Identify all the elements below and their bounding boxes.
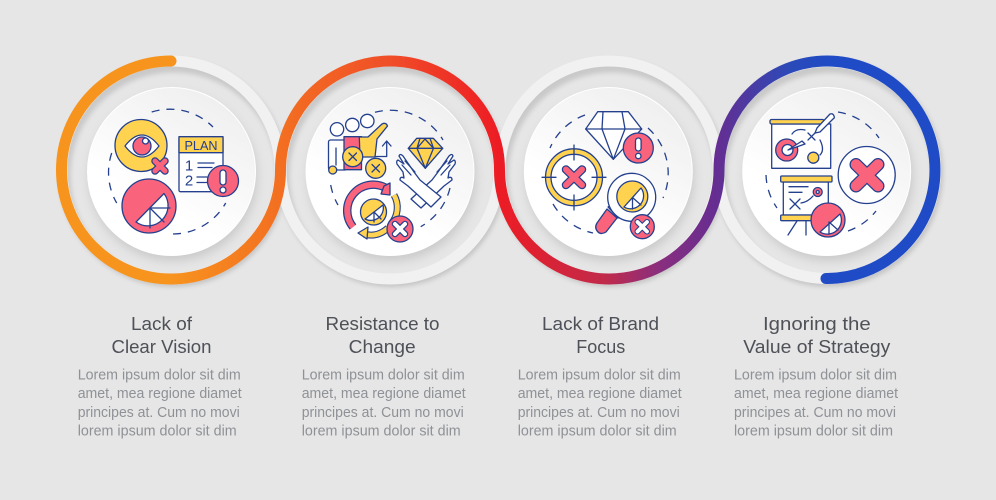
body text: amet, mea regione diamet xyxy=(302,386,466,402)
panel: step 1 circle xyxy=(59,59,287,287)
heading: lack of brand focus: Lack of Brand xyxy=(542,313,659,334)
text: step 1 xyxy=(78,313,242,440)
heading: lack of clear vision xyxy=(112,313,212,357)
icon: lack of clear vision: PLAN xyxy=(184,138,218,153)
body text: amet, mea regione diamet xyxy=(78,386,242,402)
heading: resistance to change: Resistance to xyxy=(326,313,440,334)
icon: resistance to change xyxy=(328,110,455,242)
icon: lack of clear vision: 1 xyxy=(185,158,193,174)
heading: lack of brand focus xyxy=(542,313,659,357)
body text: Lorem ipsum dolor sit dim xyxy=(518,368,681,384)
body text: principes at. Cum no movi xyxy=(78,405,240,421)
text: step 4 xyxy=(734,313,898,440)
body text xyxy=(518,368,682,440)
body text: Lorem ipsum dolor sit dim xyxy=(302,368,465,384)
icon: lack of brand focus xyxy=(542,112,668,239)
text: step 3 xyxy=(518,313,682,440)
icon: lack of clear vision xyxy=(109,109,238,234)
gradient ribbon connecting the steps xyxy=(62,61,935,279)
heading: ignoring the value of strategy xyxy=(743,313,891,357)
panel: step 4 circle xyxy=(715,59,943,287)
body text: principes at. Cum no movi xyxy=(302,405,464,421)
body text xyxy=(78,368,242,440)
heading: lack of clear vision: Lack of xyxy=(131,313,193,334)
body text: amet, mea regione diamet xyxy=(734,386,898,402)
body text xyxy=(302,368,466,440)
heading: lack of brand focus: Focus xyxy=(576,336,625,357)
body text: Lorem ipsum dolor sit dim xyxy=(734,368,897,384)
body text: Lorem ipsum dolor sit dim xyxy=(78,368,241,384)
body text: principes at. Cum no movi xyxy=(734,405,896,421)
heading: ignoring the value of strategy: Value of Strategy xyxy=(743,336,891,357)
icon: lack of clear vision: 2 xyxy=(185,172,193,190)
body text: lorem ipsum dolor sit dim xyxy=(734,424,893,440)
heading: resistance to change xyxy=(326,313,440,357)
body text: lorem ipsum dolor sit dim xyxy=(302,424,461,440)
heading: lack of clear vision: Clear Vision xyxy=(112,336,212,357)
heading: ignoring the value of strategy: Ignoring the xyxy=(763,313,871,334)
body text: lorem ipsum dolor sit dim xyxy=(518,424,677,440)
body text: principes at. Cum no movi xyxy=(518,405,680,421)
panel: step 2 circle xyxy=(278,59,506,287)
body text xyxy=(734,368,898,440)
panel: step 3 circle xyxy=(497,59,725,287)
icon: ignoring the value of strategy xyxy=(766,112,895,237)
heading: resistance to change: Change xyxy=(349,336,416,357)
body text: amet, mea regione diamet xyxy=(518,386,682,402)
body text: lorem ipsum dolor sit dim xyxy=(78,424,237,440)
text: step 2 xyxy=(302,313,466,440)
